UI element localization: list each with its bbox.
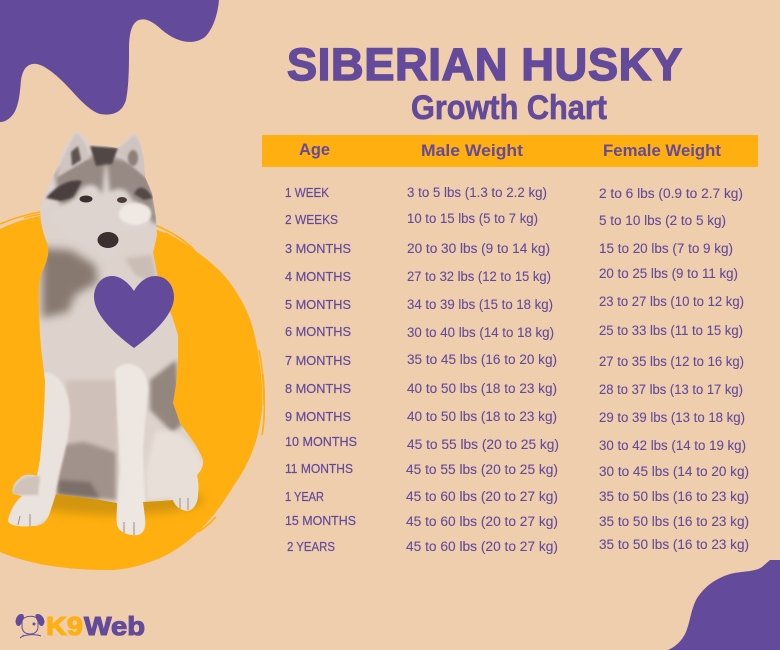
female weight column: 27 to 35 lbs (12 to 16 kg) — [599, 354, 744, 369]
decorative purple blob: top left — [0, 0, 219, 122]
ground shadow — [27, 485, 203, 515]
subtitle: Growth Chart — [411, 89, 607, 127]
table header bar: Male Weight — [421, 142, 524, 160]
table header bar: Female Weight — [603, 142, 722, 160]
female weight column: 28 to 37 lbs (13 to 17 kg) — [599, 382, 743, 397]
K9Web logo: Web — [84, 611, 145, 641]
grey neck — [42, 248, 98, 318]
logo icon: dog head — [16, 615, 44, 638]
female weight column: 25 to 33 lbs (11 to 15 kg) — [599, 323, 743, 338]
age column: 1 WEEK — [285, 186, 330, 200]
age column: 7 MONTHS — [285, 354, 351, 368]
ears — [56, 133, 90, 178]
female weight column: 30 to 45 lbs (14 to 20 kg) — [599, 464, 749, 479]
male weight column: 27 to 32 lbs (12 to 15 kg) — [407, 269, 551, 284]
male weight column: 45 to 55 lbs (20 to 25 kg) — [406, 462, 558, 477]
age column: 6 MONTHS — [285, 325, 351, 339]
K9Web logo — [16, 611, 145, 641]
right foreleg — [115, 364, 148, 537]
male weight column: 40 to 50 lbs (18 to 23 kg) — [407, 381, 557, 396]
female weight column: 35 to 50 lbs (16 to 23 kg) — [599, 489, 749, 504]
heart — [94, 276, 174, 348]
female weight column: 35 to 50 lbs (16 to 23 kg) — [599, 514, 749, 529]
age column: 10 MONTHS — [285, 435, 357, 449]
age column: 8 MONTHS — [285, 382, 351, 396]
decorative purple blob: bottom right — [668, 560, 780, 650]
male weight column: 45 to 60 lbs (20 to 27 kg) — [406, 539, 558, 554]
age column: 15 MONTHS — [285, 514, 356, 528]
fur base — [0, 125, 210, 540]
grey right flank — [150, 360, 182, 432]
male weight column: 34 to 39 lbs (15 to 18 kg) — [407, 297, 553, 312]
hind leg — [146, 431, 205, 515]
male weight column: 3 to 5 lbs (1.3 to 2.2 kg) — [407, 185, 547, 200]
age column: 2 WEEKS — [285, 213, 338, 227]
male weight column — [406, 185, 559, 554]
left foreleg — [5, 372, 70, 530]
female weight column: 20 to 25 lbs (9 to 11 kg) — [599, 266, 738, 281]
right neck shading — [126, 255, 158, 280]
female weight column: 5 to 10 lbs (2 to 5 kg) — [599, 213, 726, 228]
table header bar: Age — [299, 141, 330, 159]
age column: 9 MONTHS — [285, 410, 351, 424]
K9Web logo: K9 — [46, 611, 83, 641]
orange brush circle — [0, 212, 264, 570]
age column: 2 YEARS — [287, 540, 335, 554]
male weight column: 45 to 60 lbs (20 to 27 kg) — [406, 514, 558, 529]
bright right cheek — [119, 203, 151, 225]
toe lines — [18, 498, 188, 535]
female weight column: 35 to 50 lbs (16 to 23 kg) — [599, 537, 749, 552]
male weight column: 45 to 60 lbs (20 to 27 kg) — [406, 489, 558, 504]
male weight column: 35 to 45 lbs (16 to 20 kg) — [407, 352, 557, 367]
age column: 11 MONTHS — [285, 462, 353, 476]
age column: 5 MONTHS — [285, 298, 351, 312]
nose — [98, 232, 118, 248]
white face — [62, 163, 152, 223]
female weight column: 23 to 27 lbs (10 to 12 kg) — [599, 294, 744, 309]
male weight column: 20 to 30 lbs (9 to 14 kg) — [407, 241, 550, 256]
chest lower tone — [66, 380, 118, 450]
husky dog — [0, 125, 210, 540]
grey underbody — [56, 442, 116, 500]
female weight column: 29 to 39 lbs (13 to 18 kg) — [599, 410, 745, 425]
male weight column: 40 to 50 lbs (18 to 23 kg) — [407, 409, 557, 424]
female weight column: 2 to 6 lbs (0.9 to 2.7 kg) — [599, 186, 743, 201]
title: SIBERIAN HUSKY — [287, 39, 682, 90]
age column: 3 MONTHS — [285, 242, 351, 256]
dark crown and mask — [90, 146, 118, 166]
age column — [285, 186, 357, 554]
rear paw — [12, 476, 40, 495]
male weight column: 45 to 55 lbs (20 to 25 kg) — [407, 437, 559, 452]
grey head — [55, 156, 158, 225]
age column: 4 MONTHS — [285, 270, 351, 284]
eyes — [80, 196, 92, 202]
female weight column: 30 to 42 lbs (14 to 19 kg) — [599, 438, 746, 453]
female weight column — [599, 186, 749, 552]
age column: 1 YEAR — [285, 490, 324, 504]
female weight column: 15 to 20 lbs (7 to 9 kg) — [599, 241, 733, 256]
table header bar — [262, 135, 758, 167]
male weight column: 10 to 15 lbs (5 to 7 kg) — [407, 211, 538, 226]
male weight column: 30 to 40 lbs (14 to 18 kg) — [407, 325, 554, 340]
